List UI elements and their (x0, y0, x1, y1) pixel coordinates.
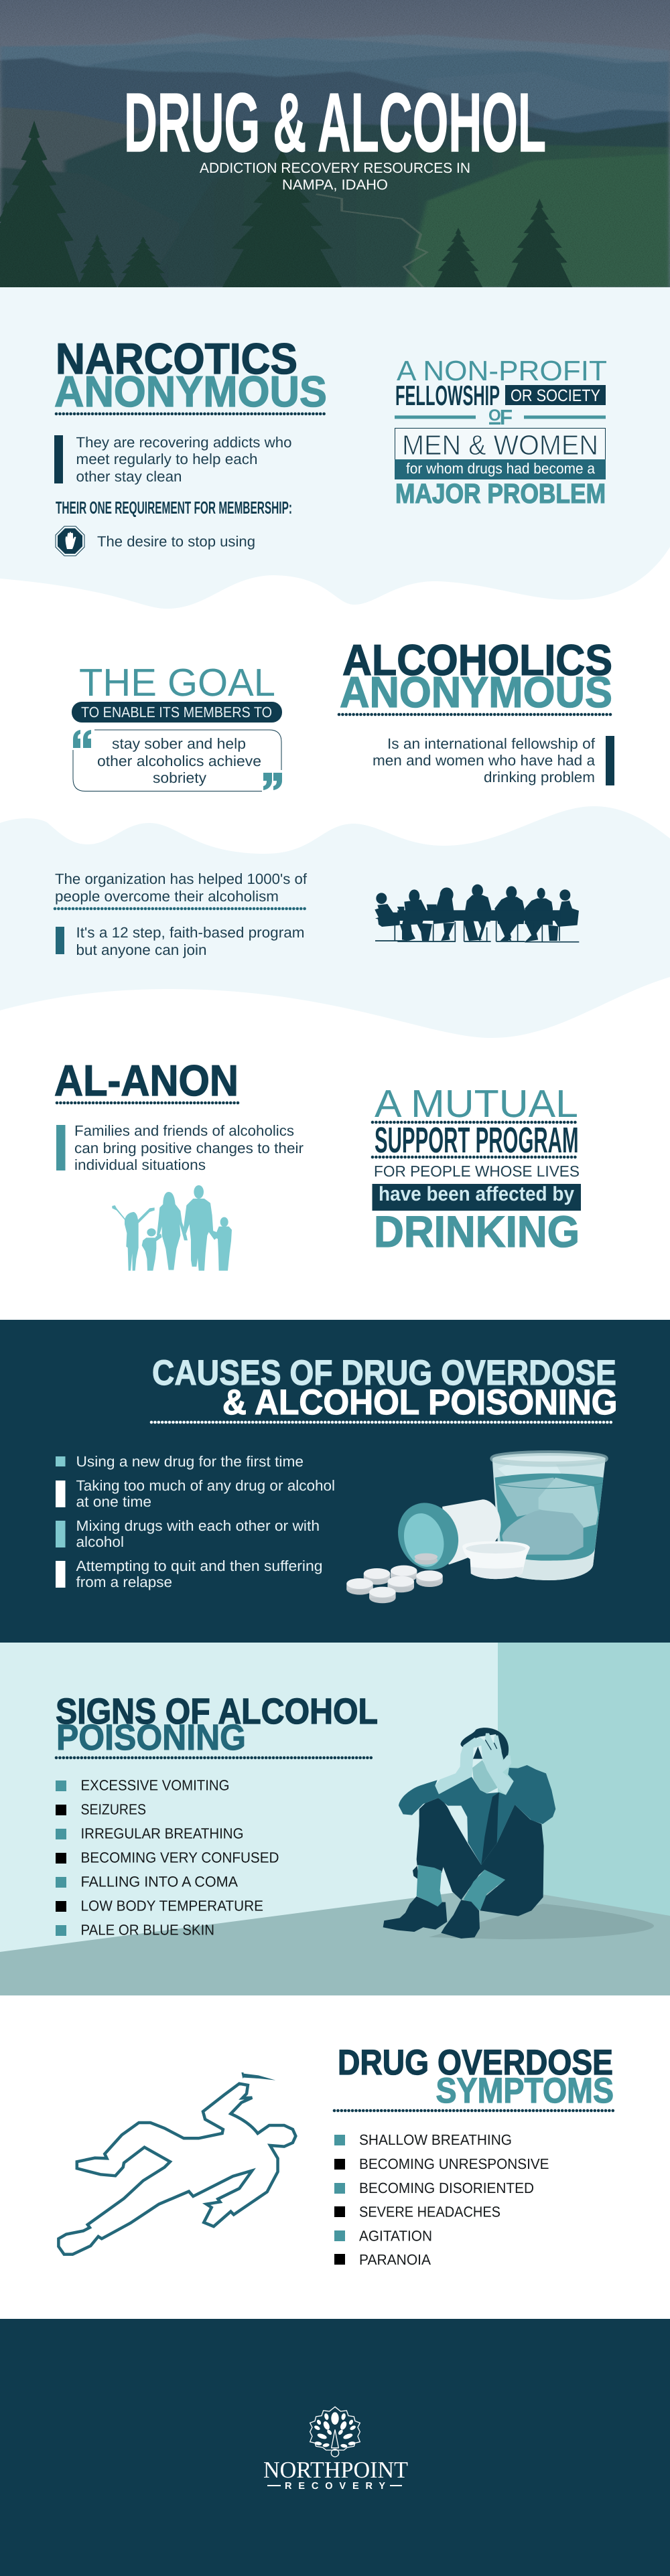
text block: international fellowship (373, 735, 614, 785)
heading: signs (56, 1691, 378, 1758)
heading: the goal: THE GOAL (79, 661, 275, 704)
text block: helped thousands: people overcome their alcoholism (55, 888, 279, 905)
heading: the goal: TO ENABLE ITS MEMBERS TO (81, 704, 272, 721)
list: causes (56, 1453, 335, 1590)
text block: twelve step (56, 924, 304, 958)
callout: goal quote: other alcoholics achieve (97, 753, 261, 769)
list: causes: Mixing drugs with each other or with (76, 1517, 320, 1534)
heading: drug overdose symptoms: DRUG OVERDOSE (338, 2043, 613, 2082)
panel: non-profit typographic: FELLOWSHIP (395, 380, 500, 411)
heading: causes (151, 1353, 618, 1422)
text block: families and friends (56, 1122, 304, 1173)
subtitle (200, 160, 470, 193)
callout: goal quote: sobriety (153, 769, 206, 786)
heading: al-anon: AL-ANON (54, 1056, 239, 1105)
logo wordmark: RECOVERY (285, 2481, 385, 2492)
text block: twelve step: but anyone can join (76, 941, 206, 958)
list: signs: LOW BODY TEMPERATURE (80, 1898, 263, 1914)
text block: twelve step: It's a 12 step, faith-based program (76, 924, 304, 941)
list: signs: EXCESSIVE VOMITING (80, 1777, 229, 1793)
text block: recovering addicts: They are recovering addicts who (76, 434, 292, 451)
illustration: distressed man sitting (383, 1728, 555, 1939)
heading: signs: SIGNS OF ALCOHOL (56, 1691, 378, 1732)
panel: mutual support typographic: FOR PEOPLE WHOSE LIVES (374, 1162, 580, 1180)
panel: mutual support typographic: DRINKING (374, 1207, 580, 1256)
panel: causes of overdose background (0, 1320, 670, 1643)
panel: non-profit typographic: O (488, 406, 501, 425)
panel: signs of alcohol poisoning background (0, 1643, 670, 1995)
heading: alcoholics anonymous: ALCOHOLICS (342, 635, 612, 684)
list: signs: FALLING INTO A COMA (80, 1874, 238, 1890)
callout: goal quote: stay sober and help (112, 735, 246, 752)
subtitle: NAMPA, IDAHO (282, 177, 388, 193)
logo wordmark: NORTHPOINT (263, 2457, 408, 2483)
panel: non-profit typographic: MAJOR PROBLEM (395, 478, 606, 509)
text block: recovering addicts: meet regularly to help each (76, 451, 257, 467)
callout: goal quote (73, 730, 282, 791)
text block: families and friends: Families and friends of alcoholics (74, 1122, 294, 1139)
text block: international fellowship: men and women who have had a (373, 752, 596, 769)
panel: non-profit typographic (395, 355, 607, 509)
hero: mountain photo background (0, 0, 670, 288)
heading: causes: CAUSES OF DRUG OVERDOSE (152, 1353, 616, 1393)
panel: narcotics anonymous background wave (0, 287, 670, 609)
list: causes: at one time (76, 1493, 151, 1510)
list: causes: Using a new drug for the first time (76, 1453, 304, 1470)
text block: families and friends: individual situations (74, 1156, 206, 1173)
list: signs: SEIZURES (80, 1801, 146, 1817)
panel: non-profit typographic: OR SOCIETY (511, 386, 600, 405)
list: symptoms (334, 2131, 549, 2268)
icon: family silhouette (112, 1185, 232, 1271)
text block: international fellowship: Is an international fellowship of (387, 735, 596, 752)
list: symptoms: SHALLOW BREATHING (359, 2131, 512, 2148)
list: symptoms: AGITATION (359, 2227, 432, 2245)
icon: northpoint peacock logo (310, 2407, 360, 2457)
text block: international fellowship: drinking problem (484, 769, 595, 785)
panel: organization wave background (0, 806, 670, 1038)
icon: meeting silhouette (375, 885, 579, 942)
heading: narcotics anonymous: NARCOTICS (56, 334, 297, 383)
illustration: chalk outline body (58, 2072, 295, 2255)
heading: the goal (72, 661, 282, 723)
heading: drug overdose symptoms: SYMPTOMS (436, 2071, 614, 2111)
list: symptoms: SEVERE HEADACHES (359, 2203, 500, 2220)
illustration: glass, pill bottle and pills (346, 1453, 606, 1603)
text: desire to stop: The desire to stop using (97, 533, 255, 550)
list: symptoms: BECOMING DISORIENTED (359, 2180, 534, 2196)
heading: narcotics anonymous (54, 334, 327, 416)
list: signs: IRREGULAR BREATHING (80, 1825, 244, 1841)
text block: helped thousands: The organization has helped 1000's of (55, 870, 308, 887)
text block: recovering addicts (54, 434, 292, 485)
icon: stop hand (56, 526, 84, 556)
heading: narcotics anonymous: ANONYMOUS (54, 367, 327, 416)
list: causes: alcohol (76, 1533, 124, 1550)
list: symptoms: PARANOIA (359, 2251, 431, 2268)
heading: alcoholics anonymous (339, 635, 613, 716)
text block: families and friends: can bring positive changes to their (74, 1140, 304, 1156)
text block: recovering addicts: other stay clean (76, 468, 182, 485)
list: causes: Taking too much of any drug or alcohol (76, 1477, 335, 1494)
panel: non-profit typographic: A NON-PROFIT (397, 355, 607, 386)
list: signs: BECOMING VERY CONFUSED (80, 1849, 279, 1866)
list: signs (56, 1777, 279, 1938)
list: symptoms: BECOMING UNRESPONSIVE (359, 2155, 549, 2172)
list: signs: PALE OR BLUE SKIN (80, 1922, 214, 1938)
subtitle: ADDICTION RECOVERY RESOURCES IN (200, 160, 470, 176)
panel: non-profit typographic: F (500, 405, 513, 429)
panel: footer (0, 2319, 670, 2576)
icon: syringe (241, 2072, 275, 2080)
panel: mutual support typographic (373, 1082, 581, 1256)
heading: drug overdose symptoms (334, 2043, 614, 2111)
panel: non-profit typographic: for whom drugs had become a (406, 460, 596, 477)
list: causes: from a relapse (76, 1574, 172, 1590)
heading: alcoholics anonymous: ANONYMOUS (340, 668, 612, 716)
text block: helped thousands (55, 870, 308, 909)
panel: non-profit typographic: MEN & WOMEN (402, 429, 598, 461)
panel: mutual support typographic: have been affected by (379, 1183, 574, 1205)
heading: causes: & ALCOHOL POISONING (222, 1383, 618, 1422)
heading: signs: POISONING (56, 1718, 246, 1758)
subheading: requirement: THEIR ONE REQUIREMENT FOR MEMBERSHIP: (56, 498, 292, 518)
panel: mutual support typographic: A MUTUAL (375, 1082, 578, 1126)
list: causes: Attempting to quit and then suffering (76, 1558, 323, 1574)
